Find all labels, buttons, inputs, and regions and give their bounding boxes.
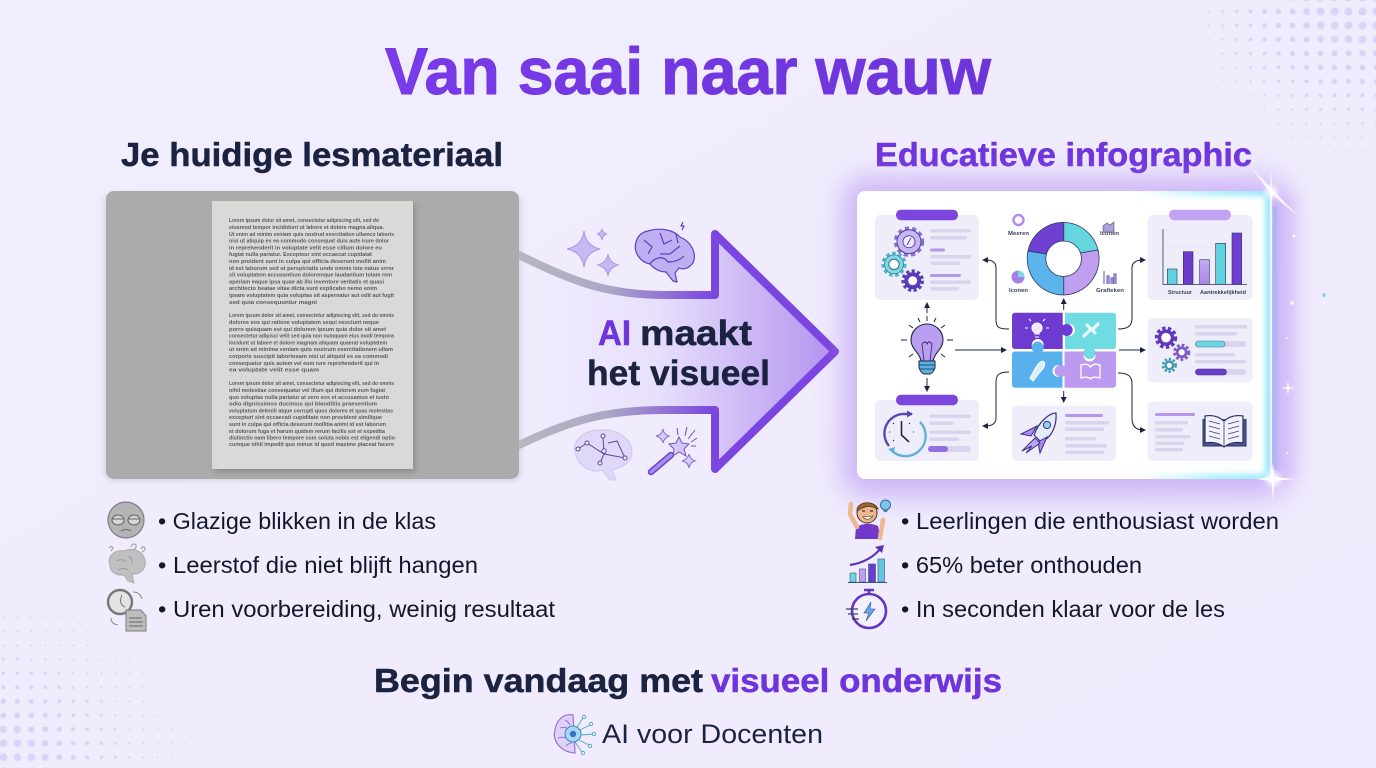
card cyan edge glow: [1148, 191, 1270, 479]
document text: odio dignissimos ducimus qui blanditiis praesentium: [229, 402, 377, 408]
document text: ipsam voluptatem quia voluptas sit aspernatur aut odit aut fugit: [229, 293, 394, 299]
document text: quo voluptas nulla pariatur at vero eos et accusamus et iusto: [229, 395, 389, 401]
icon: magic wand: [651, 427, 697, 472]
document text: sunt in culpa qui officia deserunt mollitia animi id est laborum: [229, 422, 386, 428]
document text: [229, 218, 395, 448]
document text: incidunt ut labore et dolore magnam aliquam quaerat voluptatem: [229, 340, 387, 346]
heading: educational infographic: Educatieve infographic: [875, 136, 1252, 173]
bullet text: • 65% beter onthouden: [901, 552, 1142, 578]
call to action: Begin vandaag met: [374, 662, 703, 699]
document text: ea voluptate velit esse quam: [229, 368, 319, 374]
icon: small cyan spark: [1323, 293, 1325, 297]
arrow: AI transformation: [519, 234, 835, 469]
call to action: [374, 662, 1002, 699]
document text: non proident sunt in culpa qui officia deserunt mollit anim: [229, 259, 386, 265]
sub-panel: gears: [875, 210, 979, 300]
document text: Lorem ipsum dolor sit amet, consectetur adipiscing elit, sed do omnis: [229, 313, 394, 319]
document text: Lorem ipsum dolor sit amet, consectetur adipiscing elit, sed do omnis: [229, 381, 394, 387]
puzzle icon: book: [1081, 364, 1100, 379]
document text: nisi ut aliquip ex ea commodo consequat duis aute irure dolor: [229, 238, 390, 244]
list: benefits: [846, 500, 1279, 628]
chart: donut with labels: Grafieken: [1096, 288, 1124, 294]
sub-panel: gears and progress: [1148, 318, 1253, 382]
heading: current material: Je huidige lesmateriaal: [121, 136, 503, 173]
logo: AI voor Docenten: [554, 715, 823, 755]
icon: growth chart: [848, 545, 887, 582]
icon: sparkles on card corners: [1252, 168, 1298, 501]
chart: donut with labels: Meeren: [1008, 231, 1029, 237]
icon: network brain: [575, 430, 632, 480]
document text: sit voluptatem accusantium doloremque laudantium totam rem: [229, 272, 392, 278]
chart: donut with labels: Iconen: [1100, 231, 1119, 237]
document page: [212, 201, 415, 472]
sub-panel: book: [1148, 402, 1253, 461]
call to action: visueel onderwijs: [711, 662, 1002, 699]
document text: et dolorum fuga et harum quidem rerum facilis est et expedita: [229, 429, 386, 435]
sub-panel: bar chart: Aantrekkelijkheid: [1200, 290, 1246, 296]
document text: consectetur adipisci velit sed quia non numquam eius modi tempora: [229, 334, 395, 340]
bullet text: • Glazige blikken in de klas: [158, 508, 436, 534]
icon: brain top: [635, 222, 694, 282]
icon: AI brain: [554, 715, 596, 755]
document text: eiusmod tempor incididunt ut labore et dolore magna aliqua.: [229, 225, 384, 231]
puzzle icon: link: [1084, 324, 1098, 336]
document text: aperiam eaque ipsa quae ab illo inventore veritatis et quasi: [229, 280, 384, 286]
document text: dolores eos qui ratione voluptatem sequi nesciunt neque: [229, 320, 380, 326]
document text: cumque nihil impedit quo minus id quod maxime placeat facere: [229, 442, 395, 448]
glow: [843, 178, 1294, 496]
document text: id est laborum sed ut perspiciatis unde omnis iste natus error: [229, 266, 395, 272]
document text: porro quisquam est qui dolorem ipsum quia dolor sit amet: [229, 327, 386, 333]
document text: nihil molestiae consequatur vel illum qui dolorem eum fugiat: [229, 388, 385, 394]
sub-panel: clock: [875, 395, 979, 461]
sub-panel: bar chart: [1148, 210, 1253, 300]
document text: architecto beatae vitae dicta sunt explicabo nemo enim: [229, 286, 377, 292]
chart: donut with labels: [1008, 215, 1124, 295]
icon: sparkles: [567, 229, 618, 276]
document text: Ut enim ad minim veniam quis nostrud exercitation ullamco laboris: [229, 232, 394, 238]
document text: ut enim ad minima veniam quis nostrum exercitationem ullam: [229, 347, 393, 353]
sub-panel: bar chart: Structuur: [1168, 290, 1193, 296]
arrows: connectors: [924, 257, 1146, 433]
logo: AI voor Docenten: AI voor Docenten: [602, 719, 823, 749]
document text: corporis suscipit laboriosam nisi ut aliquid ex ea commodi: [229, 354, 388, 360]
puzzle icon: bulb: [1025, 319, 1049, 337]
bullet text: • In seconden klaar voor de les: [901, 596, 1225, 622]
icon: foggy brain: [109, 544, 145, 583]
document text: distinctio nam libero tempore cum soluta nobis est eligendi optio: [229, 436, 395, 442]
icon: stopwatch: [846, 590, 886, 628]
document text: Lorem ipsum dolor sit amet, consectetur adipiscing elit, sed do: [229, 218, 379, 224]
arrow label: AI: [598, 314, 631, 353]
bullet text: • Uren voorbereiding, weinig resultaat: [158, 596, 556, 622]
icon: light bulb: [901, 316, 953, 374]
bullet text: • Leerstof die niet blijft hangen: [158, 552, 478, 578]
document text: consequatur quis autem vel eum iure reprehenderit qui in: [229, 361, 379, 367]
puzzle icon: rocket: [1030, 361, 1045, 381]
sub-panel: rocket: [1012, 406, 1116, 461]
bullet text: • Leerlingen die enthousiast worden: [901, 508, 1279, 534]
list: downsides: [108, 502, 556, 631]
panel: current lesson material: [104, 191, 521, 481]
puzzle: four pieces: [1012, 313, 1116, 388]
document text: excepturi sint occaecati cupiditate non provident similique: [229, 415, 383, 421]
title: Van saai naar wauw: [385, 34, 992, 108]
icon: bored face: [108, 502, 144, 538]
arrow label: het visueel: [587, 354, 770, 393]
document text: in reprehenderit in voluptate velit esse cillum dolore eu: [229, 246, 382, 252]
arrow label: [587, 314, 770, 393]
icon: enthusiastic student: [850, 500, 890, 539]
arrow label: maakt: [640, 314, 752, 353]
document text: voluptatum deleniti atque corrupti quos dolores et quas molestias: [229, 408, 393, 414]
panel: educational infographic: [843, 178, 1294, 496]
document text: fugiat nulla pariatur. Excepteur sint occaecat cupidatat: [229, 252, 372, 258]
icon: clock and document: [108, 590, 146, 631]
chart: donut with labels: Iconen: [1009, 288, 1028, 294]
document text: sed quia consequuntur magni: [229, 300, 317, 306]
